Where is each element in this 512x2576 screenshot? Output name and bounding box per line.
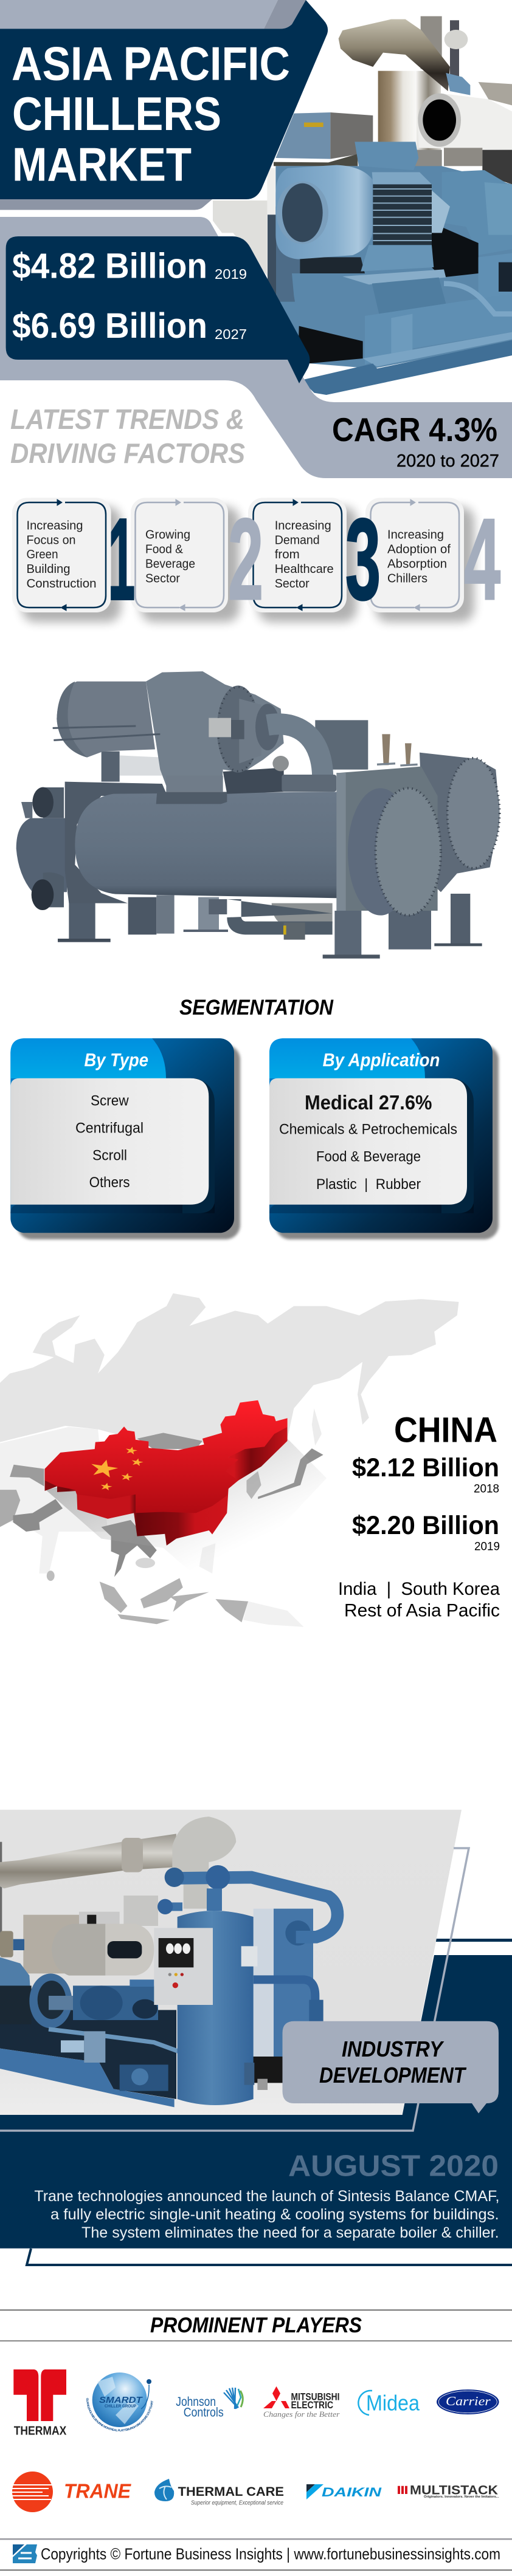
- market size values: $4.82 Billion: [12, 247, 207, 286]
- dark inner plate: [441, 1078, 474, 1213]
- panel: prominent players: [0, 2310, 512, 2512]
- grey lower block: [0, 217, 512, 478]
- logo: Mitsubishi Electric: [263, 2386, 340, 2419]
- list items: [279, 1091, 457, 1193]
- description: [34, 2188, 499, 2241]
- logo: Smardt: GUANGZHOU MELBOURNE MONTREAL PLATTSBURGH SINGAPORE STUTTGART: [86, 2398, 153, 2431]
- text: China market values: 2018: [474, 1482, 499, 1496]
- logo: Trane: TRANE: [64, 2480, 131, 2502]
- factor card 1: Focus on: [27, 533, 75, 547]
- factor card 3: [248, 498, 347, 612]
- title: ASIA PACIFIC: [12, 37, 290, 91]
- heading: by application: By Application: [323, 1050, 440, 1070]
- flag stars: [88, 1446, 144, 1491]
- factor card 1: Building: [27, 562, 71, 576]
- logo: Thermal Care: [154, 2479, 284, 2507]
- list items: Medical 27.6%: [305, 1091, 432, 1114]
- description: Trane technologies announced the launch of Sintesis Balance CMAF,: [34, 2188, 499, 2205]
- factor card 3: Sector: [275, 577, 310, 591]
- factor card 3: Demand: [275, 533, 320, 547]
- footer bottom rule: [0, 2570, 512, 2571]
- factor card 1: Green: [27, 547, 58, 561]
- panel: header: [0, 0, 512, 478]
- logo: Mitsubishi Electric: MITSUBISHI: [291, 2391, 339, 2403]
- CAGR: CAGR 4.3%: [332, 411, 497, 448]
- logo: Trane: [12, 2472, 131, 2512]
- title panel: [0, 0, 328, 199]
- South and West Asia: [10, 1465, 44, 1486]
- China top face: [45, 1400, 288, 1513]
- logo: Multistack: Originators. Innovators. Never the Imitators...: [424, 2495, 499, 2499]
- header highlight: [10, 1038, 166, 1078]
- text: China market values: Rest of Asia Pacific: [344, 1601, 500, 1621]
- logo: Multistack: MULTISTACK: [410, 2484, 498, 2498]
- factor card 1: [12, 498, 111, 612]
- numerals: 1: [108, 495, 135, 624]
- Russia and Central Asia: [0, 1293, 458, 1444]
- heading: by type: By Type: [84, 1050, 148, 1070]
- list panel: [10, 1078, 209, 1205]
- list items: Food & Beverage: [316, 1149, 421, 1165]
- factor card 2: Food &: [145, 543, 183, 557]
- logo: Thermal Care: Superior equipment, Exceptional service: [191, 2500, 283, 2507]
- factor card 2: Beverage: [145, 557, 195, 571]
- top rule: [0, 2310, 512, 2311]
- logo: Daikin: DAIKIN: [322, 2485, 382, 2499]
- text: China market values: $2.20 Billion: [352, 1511, 499, 1540]
- logo: Johnson Controls: [176, 2388, 243, 2420]
- text: China market values: CHINA: [394, 1411, 497, 1450]
- market size values: 2027: [215, 326, 247, 342]
- factor card 2: Growing: [145, 528, 190, 542]
- image: industrial chiller with blue motor: [213, 16, 512, 395]
- list items: Centrifugal: [75, 1120, 144, 1136]
- list items: Chemicals & Petrochemicals: [279, 1122, 457, 1138]
- factor card 3: Increasing: [275, 518, 331, 532]
- factor card 4: Chillers: [387, 572, 427, 586]
- callout text: [319, 2036, 467, 2088]
- logo: Smardt: CHILLER GROUP: [105, 2405, 136, 2409]
- logo: Midea: Midea: [366, 2391, 420, 2416]
- Philippines and New Guinea: [199, 1543, 303, 1627]
- logo: Fortune Business Insights: [13, 2544, 37, 2563]
- heading: latest trends: LATEST TRENDS &: [10, 403, 244, 435]
- logo: Carrier: [437, 2389, 499, 2414]
- card shadows: [22, 507, 474, 622]
- numerals: [108, 495, 500, 624]
- market size values: $6.69 Billion: [12, 306, 207, 346]
- card shadow: [17, 1045, 240, 1239]
- factor card 4: Absorption: [387, 557, 447, 571]
- card background: [10, 1038, 234, 1233]
- factor card 2: Sector: [145, 572, 180, 586]
- header highlight: [269, 1038, 425, 1078]
- factor card 3: Healthcare: [275, 562, 334, 576]
- heading: latest trends: DRIVING FACTORS: [10, 437, 245, 469]
- logo: Thermax: THERMAX: [14, 2425, 67, 2438]
- description: The system eliminates the need for a separate boiler & chiller.: [81, 2224, 499, 2241]
- navy outline: [27, 2249, 512, 2265]
- bottom band: [269, 1204, 474, 1213]
- card background: [269, 1038, 493, 1233]
- bottom band: [10, 1204, 215, 1213]
- footer top rule: [0, 2538, 512, 2540]
- CAGR: 2020 to 2027: [396, 451, 499, 471]
- logo: Daikin: [306, 2484, 382, 2499]
- panel: driving factors: [12, 495, 500, 624]
- factor card 4: Adoption of: [387, 543, 451, 557]
- factor card 4: Increasing: [387, 528, 444, 542]
- title: MARKET: [12, 137, 192, 191]
- logo: Johnson Controls: Johnson: [176, 2395, 216, 2409]
- list items: Plastic | Rubber: [316, 1176, 421, 1193]
- description: a fully electric single-unit heating & cooling systems for buildings.: [50, 2206, 499, 2223]
- factor card 1: Construction: [27, 577, 96, 591]
- text: China market values: [338, 1411, 500, 1621]
- logo: Johnson Controls: Controls: [184, 2406, 224, 2420]
- title: [12, 37, 290, 191]
- card shadow: [275, 1045, 499, 1239]
- logo: Smardt: [86, 2372, 153, 2431]
- Mongolia: [137, 1433, 202, 1449]
- dark inner plate: [182, 1078, 215, 1213]
- callout text: DEVELOPMENT: [319, 2063, 467, 2088]
- navy block: [0, 1955, 512, 2249]
- logo: Smardt: SMARDT: [99, 2395, 144, 2405]
- market size values: 2019: [215, 266, 247, 282]
- darker band wedge: [264, 0, 306, 29]
- very light land: [0, 1427, 108, 1574]
- list items: [75, 1092, 144, 1191]
- navy rule: [436, 1939, 512, 1942]
- text: China market values: 2019: [474, 1540, 500, 1553]
- heading: prominent players: PROMINENT PLAYERS: [150, 2314, 362, 2337]
- factor card 3: from: [275, 547, 300, 561]
- Sakhalin: [312, 1408, 322, 1445]
- logo: Carrier: Carrier: [446, 2394, 491, 2408]
- panel: industry development: [0, 1810, 512, 2265]
- footer: [0, 2538, 512, 2571]
- logo: Mitsubishi Electric: ELECTRIC: [291, 2399, 333, 2411]
- factor card 2: [131, 498, 228, 612]
- title: CHILLERS: [12, 87, 221, 140]
- logo: Thermal Care: THERMAL CARE: [178, 2485, 284, 2499]
- factor card 4: [365, 498, 464, 612]
- list panel: [269, 1078, 467, 1205]
- text: China market values: $2.12 Billion: [352, 1453, 499, 1482]
- panel: by application: [269, 1038, 499, 1239]
- list items: Others: [89, 1174, 130, 1191]
- Indonesia: [100, 1578, 248, 1624]
- list items: Scroll: [92, 1147, 127, 1163]
- numerals: 2: [228, 495, 263, 624]
- lower rule: [0, 2340, 512, 2341]
- market size values: [12, 247, 247, 346]
- top grey band: [0, 0, 278, 29]
- market size panel: [6, 236, 310, 383]
- grey outline: [0, 1848, 469, 2131]
- CAGR: [332, 411, 499, 471]
- logo: Mitsubishi Electric: Changes for the Better: [263, 2410, 340, 2419]
- callout: [282, 2021, 499, 2113]
- map: Asia Pacific with China highlighted: [0, 1293, 458, 1627]
- Southeast Asia: [101, 1520, 157, 1577]
- image: blue chiller with control panel: [0, 1817, 337, 2107]
- heading: latest trends: [10, 403, 245, 469]
- logo: Thermax: [13, 2369, 67, 2438]
- Korea and Japan: [246, 1471, 261, 1499]
- China side face: [45, 1418, 288, 1546]
- callout text: INDUSTRY: [342, 2036, 445, 2061]
- numerals: 3: [345, 495, 381, 624]
- photo panel: [0, 1810, 462, 2115]
- text: China market values: India | South Korea: [338, 1579, 500, 1599]
- list items: Screw: [91, 1092, 129, 1109]
- panel: by type: [10, 1038, 240, 1239]
- factor card 1: Increasing: [27, 518, 83, 532]
- grey strip under title: [0, 199, 212, 210]
- China cast shadow: [46, 1439, 327, 1574]
- heading: segmentation: SEGMENTATION: [179, 996, 334, 1019]
- image: grey centrifugal chiller: [16, 671, 500, 959]
- date: AUGUST 2020: [288, 2150, 499, 2182]
